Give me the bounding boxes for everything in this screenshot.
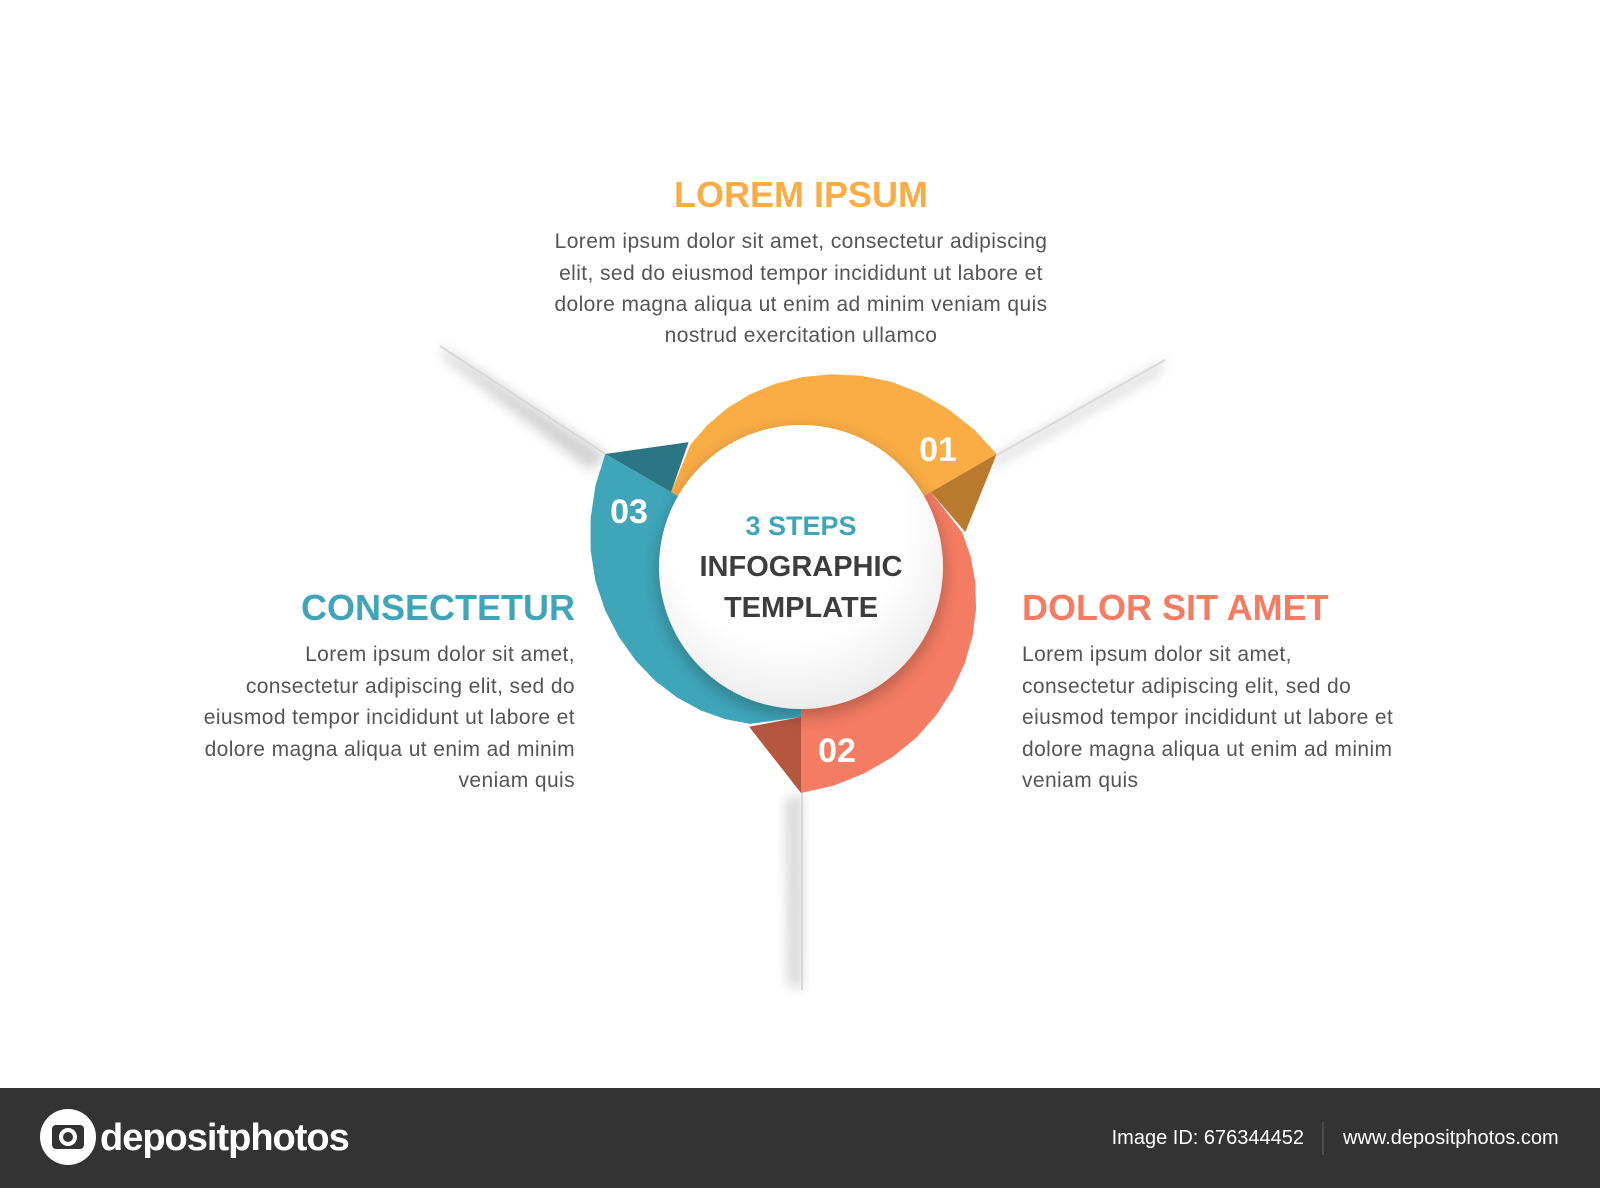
block: consectetur: CONSECTETUR <box>301 587 575 628</box>
segment 03: teal <box>536 415 836 776</box>
block: lorem ipsum: dolore magna aliqua ut enim ad minim veniam quis <box>554 293 1048 316</box>
step numbers: 03 <box>610 493 648 531</box>
block: consectetur: consectetur adipiscing elit, sed do <box>246 675 575 698</box>
step numbers: 01 <box>919 431 957 469</box>
block: dolor sit amet: veniam quis <box>1022 769 1138 792</box>
block: dolor sit amet: Lorem ipsum dolor sit amet, <box>1022 643 1292 666</box>
block: consectetur <box>204 587 575 792</box>
block: consectetur: veniam quis <box>459 769 575 792</box>
segment 02: coral <box>733 472 1033 833</box>
block: lorem ipsum: elit, sed do eiusmod tempor incididunt ut labore et <box>559 262 1043 285</box>
footer bar: www.depositphotos.com <box>1342 1127 1559 1149</box>
block: lorem ipsum <box>554 174 1048 347</box>
block: dolor sit amet: DOLOR SIT AMET <box>1022 587 1329 628</box>
icon: camera logo <box>40 1109 96 1165</box>
block: consectetur: Lorem ipsum dolor sit amet, <box>305 643 575 666</box>
block: consectetur: dolore magna aliqua ut enim ad minim <box>205 738 575 761</box>
footer bar: depositphotos <box>100 1117 349 1159</box>
footer bar <box>0 1088 1600 1188</box>
block: dolor sit amet: eiusmod tempor incididunt ut labore et <box>1022 706 1393 729</box>
block: lorem ipsum: LOREM IPSUM <box>674 174 928 215</box>
block: lorem ipsum: nostrud exercitation ullamco <box>665 324 937 347</box>
center white circle <box>659 425 943 709</box>
block: lorem ipsum: Lorem ipsum dolor sit amet, consectetur adipiscing <box>555 230 1047 253</box>
center title: TEMPLATE <box>724 592 878 624</box>
shadow rays <box>440 346 1165 990</box>
footer bar: Image ID: 676344452 <box>1112 1127 1304 1149</box>
block: dolor sit amet <box>1022 587 1393 792</box>
segment 01: orange <box>671 374 997 532</box>
block: consectetur: eiusmod tempor incididunt ut labore et <box>204 706 575 729</box>
block: dolor sit amet: consectetur adipiscing elit, sed do <box>1022 675 1351 698</box>
center title: INFOGRAPHIC <box>700 551 903 583</box>
block: dolor sit amet: dolore magna aliqua ut enim ad minim <box>1022 738 1392 761</box>
center title: 3 STEPS <box>745 511 857 541</box>
step numbers <box>610 431 957 770</box>
center title <box>700 511 903 624</box>
ring diagram <box>536 374 1033 833</box>
step numbers: 02 <box>818 732 856 770</box>
